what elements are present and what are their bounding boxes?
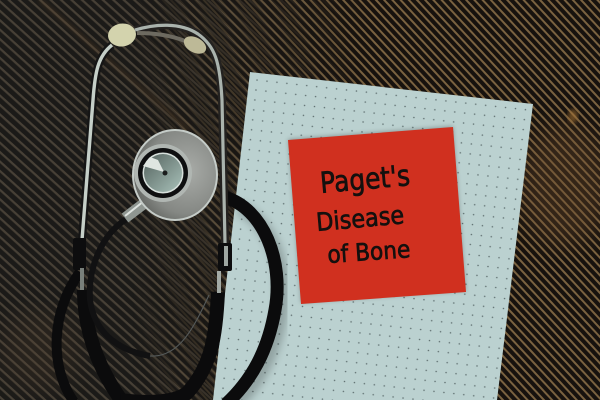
metal connectors bbox=[73, 238, 232, 293]
metal binaural arms bbox=[82, 25, 225, 243]
handwritten note text bbox=[315, 158, 411, 269]
red sticky note bbox=[288, 126, 466, 304]
handwritten note text: of Bone bbox=[326, 235, 411, 269]
ear tips bbox=[107, 22, 209, 57]
chest piece disc bbox=[132, 129, 218, 221]
chest piece stem bbox=[125, 201, 146, 218]
stethoscope bbox=[57, 22, 282, 400]
tube shadow on paper bbox=[234, 208, 282, 400]
black rubber tubing bbox=[57, 197, 277, 400]
handwritten note text: Disease bbox=[315, 200, 405, 237]
notebook paper with dot grid bbox=[213, 72, 533, 400]
handwritten note text: Paget's bbox=[319, 158, 411, 200]
